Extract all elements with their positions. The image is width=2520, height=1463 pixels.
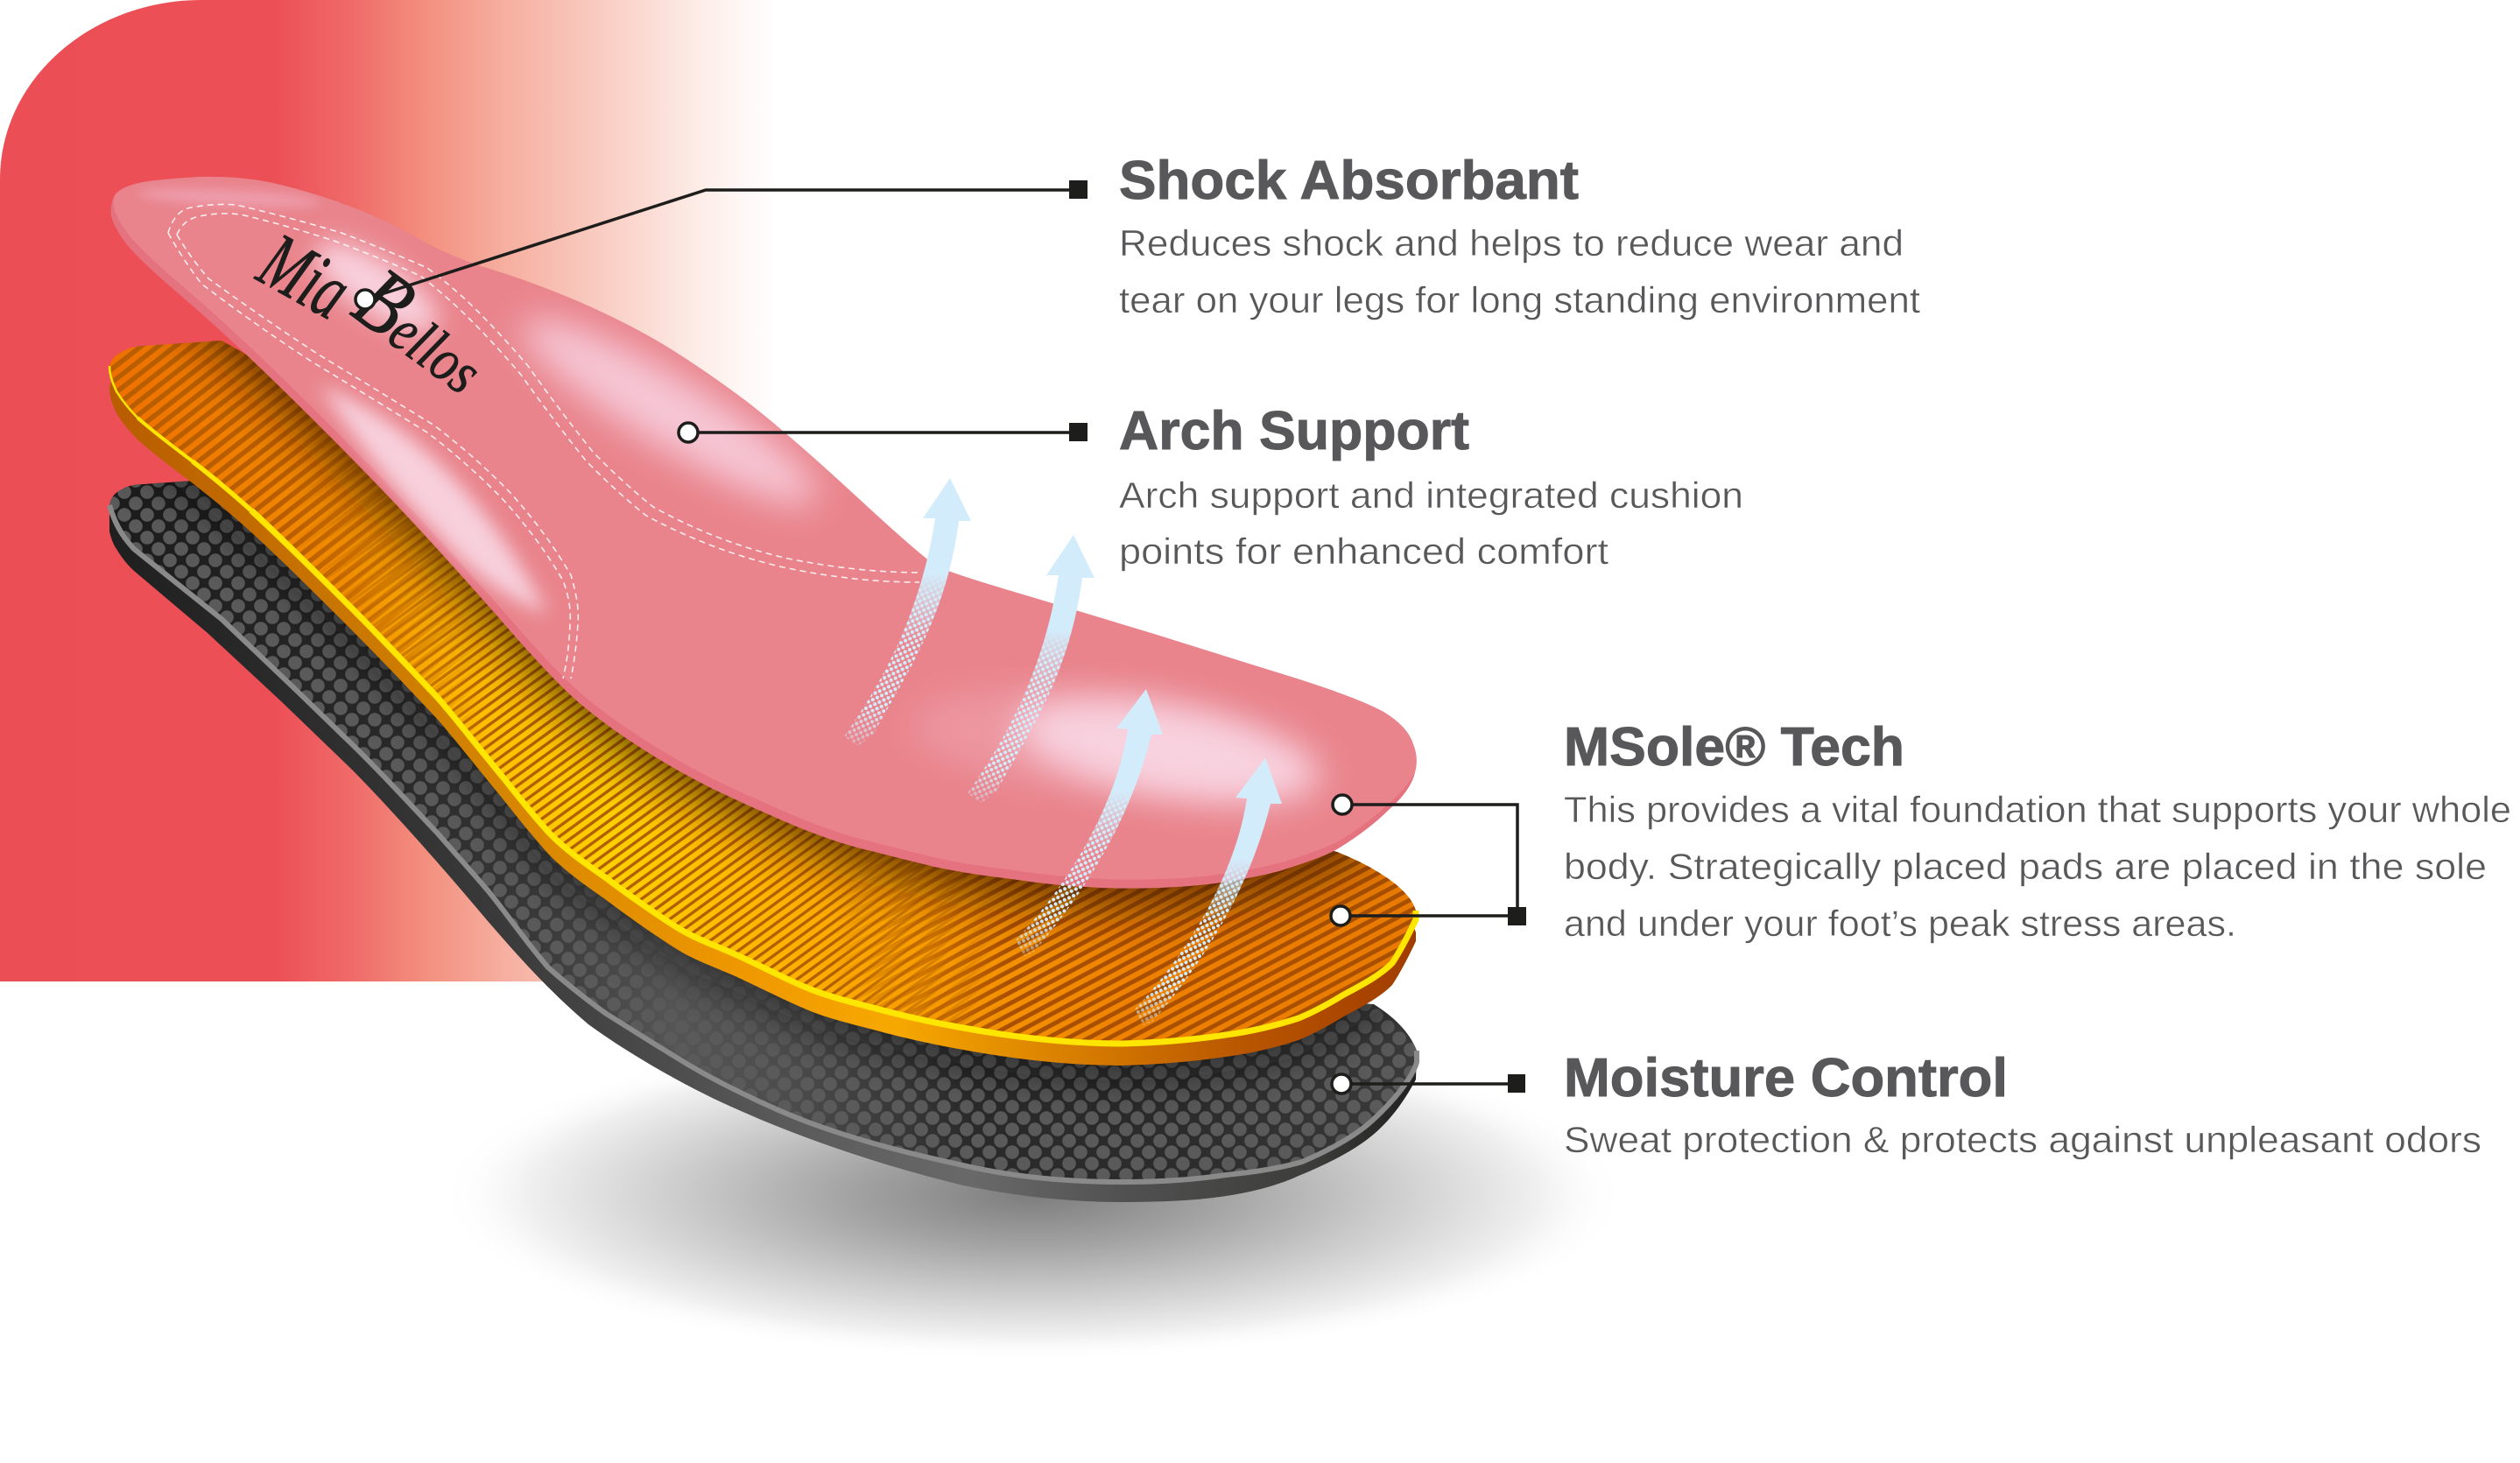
pink layer top surface xyxy=(114,168,1419,880)
description xyxy=(1119,475,1743,572)
logo: Mia Bellos: Bellos xyxy=(336,249,510,412)
description: Sweat protection & protects against unpleasant odors xyxy=(1564,1119,2481,1160)
stitching lines xyxy=(168,204,922,679)
arrow 2 xyxy=(968,535,1095,803)
heel pad highlight xyxy=(302,226,451,348)
description: points for enhanced comfort xyxy=(1119,531,1608,572)
pink layer rim xyxy=(110,177,1417,889)
description xyxy=(1564,789,2511,944)
logo: Mia Bellos: Mia xyxy=(244,215,365,336)
logo: Mia Bellos xyxy=(244,215,510,412)
forefoot highlight xyxy=(1010,679,1327,823)
pink top insole layer xyxy=(110,168,1419,889)
red gradient background panel xyxy=(0,0,788,981)
heading: Shock Absorbant xyxy=(1119,151,1579,211)
arrow 3 xyxy=(1016,689,1163,956)
text block: Arch Support xyxy=(1119,401,1743,572)
black moisture control layer xyxy=(107,481,1419,1202)
orange MSole layer xyxy=(109,341,1418,1066)
connector: MSole Tech xyxy=(1331,795,1526,925)
forefoot wide glow xyxy=(916,686,1091,790)
description: tear on your legs for long standing environment xyxy=(1119,279,1920,320)
heading: MSole® Tech xyxy=(1564,717,1904,777)
connector: Shock Absorbant xyxy=(355,180,1088,309)
connector: Arch Support xyxy=(679,423,1088,442)
orange layer striped top surface xyxy=(109,341,1416,1040)
ground shadow under insole xyxy=(438,1029,1629,1361)
description xyxy=(1119,222,1920,320)
description: and under your foot’s peak stress areas. xyxy=(1564,903,2236,944)
arrow 4 xyxy=(1135,758,1282,1025)
text block: Moisture Control xyxy=(1564,1048,2481,1160)
orange layer yellow edge line xyxy=(109,366,1416,1044)
description: Arch support and integrated cushion xyxy=(1119,475,1743,516)
text block: Shock Absorbant xyxy=(1119,151,1920,320)
black layer dotted top surface xyxy=(109,481,1417,1179)
heading: Arch Support xyxy=(1119,401,1469,461)
description: Reduces shock and helps to reduce wear and xyxy=(1119,222,1904,264)
lateral side highlight xyxy=(320,385,547,613)
heel rim highlight xyxy=(137,186,321,210)
description: This provides a vital foundation that supports your whole xyxy=(1564,789,2511,830)
arrow 1 xyxy=(844,478,971,746)
black layer grey rim xyxy=(109,505,1417,1182)
black layer side edge xyxy=(109,481,1417,1202)
arch support highlight xyxy=(505,293,834,530)
connector: Moisture Control xyxy=(1332,1074,1525,1094)
orange layer side edge xyxy=(109,362,1416,1066)
description: body. Strategically placed pads are placed in the sole xyxy=(1564,846,2487,887)
airflow arrows xyxy=(844,478,1282,1025)
heading: Moisture Control xyxy=(1564,1048,2008,1108)
text block: MSole Tech xyxy=(1564,717,2511,944)
